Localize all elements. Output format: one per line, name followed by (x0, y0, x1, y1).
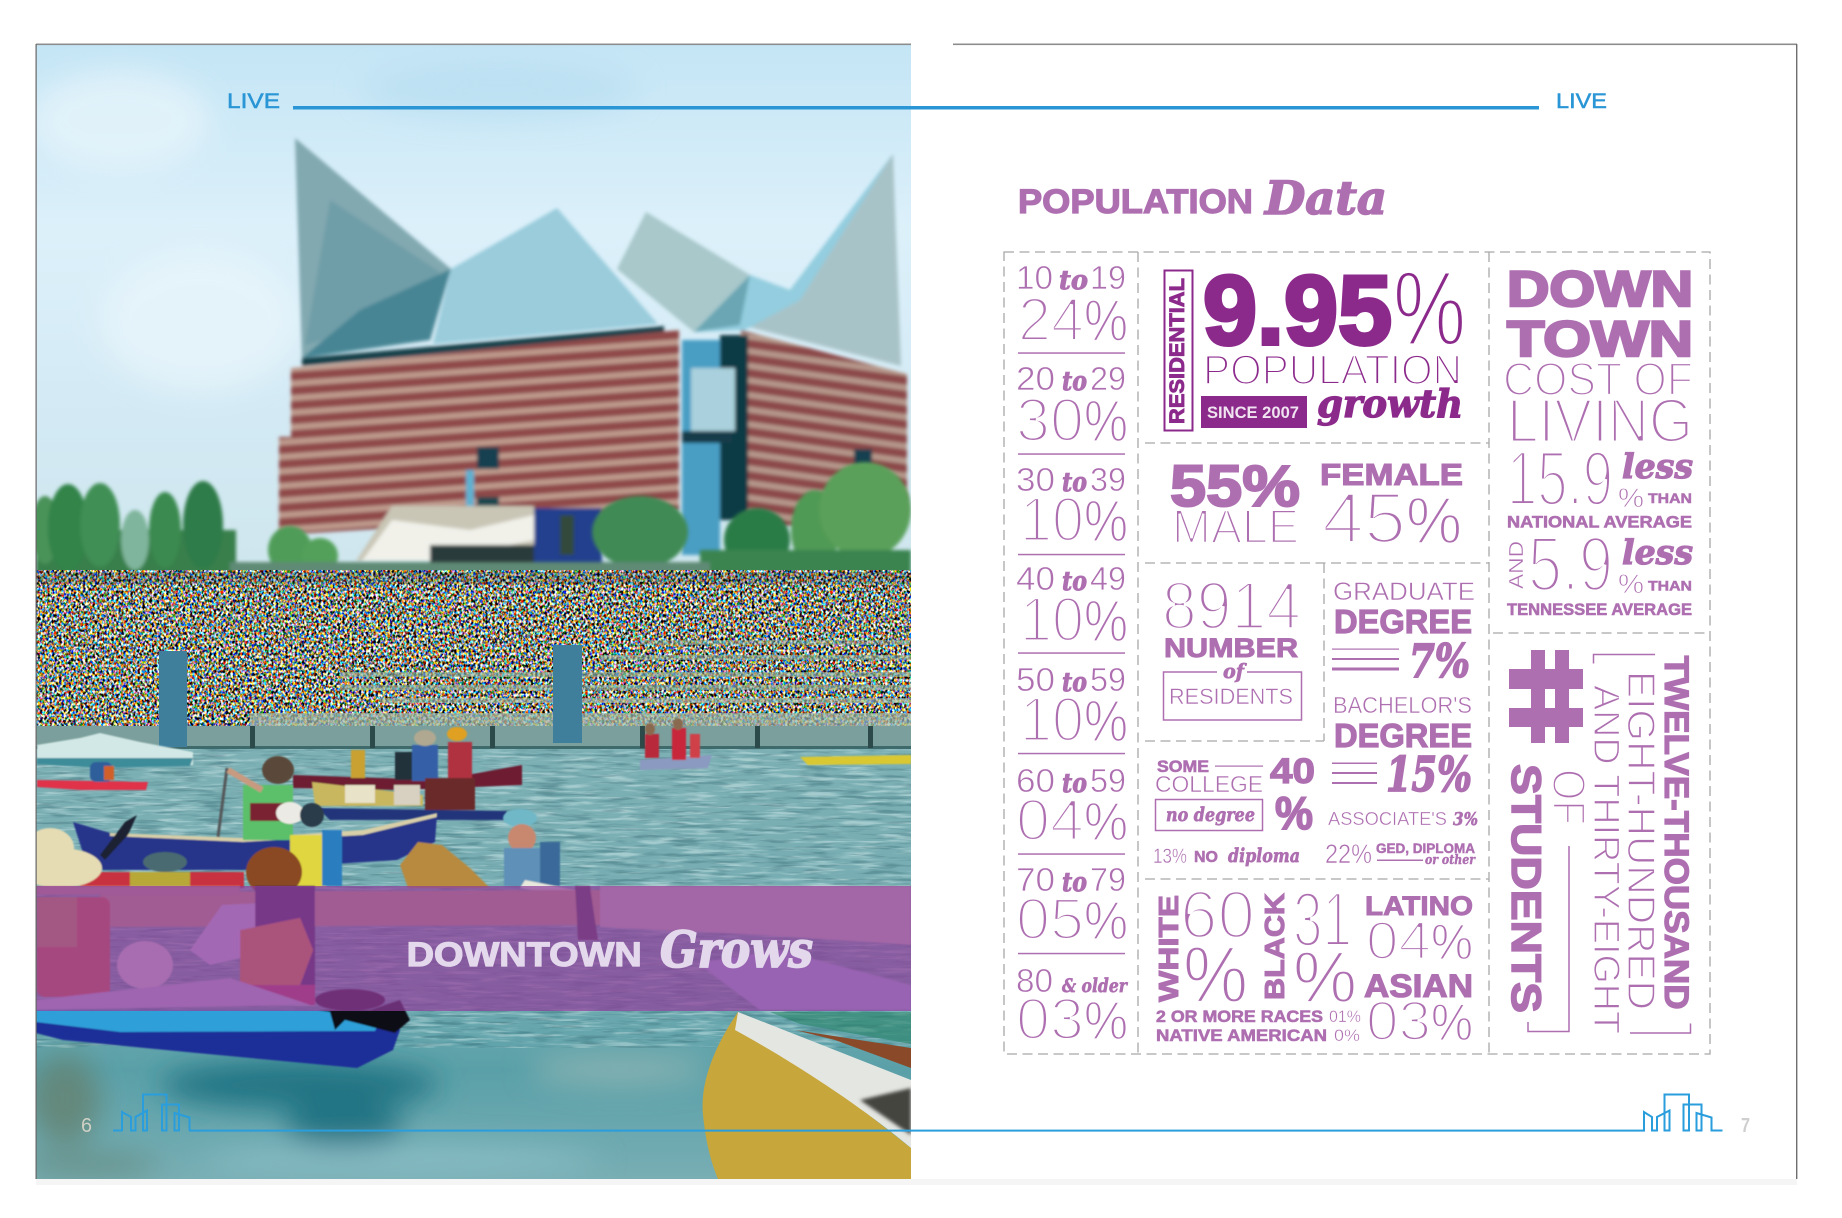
yellow canoe (703, 1012, 911, 1179)
latino 04%: % (1431, 914, 1473, 970)
growth script: growth (1317, 381, 1463, 426)
header line (293, 106, 1539, 110)
header: LIVE right: LIVE (1556, 90, 1607, 113)
boats under the band (36, 886, 911, 1011)
female 45% (1320, 457, 1463, 559)
latino 04% (1365, 891, 1473, 971)
white 60%: WHITE (1153, 895, 1184, 1002)
water ripples (36, 748, 911, 1048)
age row 10 to 19: 19 (1090, 259, 1126, 296)
aquarium building (279, 138, 907, 570)
age row 50 to 59: 59 (1090, 661, 1126, 698)
population: POPULATION (1203, 346, 1462, 393)
age row 70 to 79: 79 (1090, 861, 1126, 898)
associate's 3%: 3% (1453, 809, 1478, 830)
of: OF (1543, 769, 1595, 825)
15.9% less than national average: THAN (1648, 490, 1692, 506)
dashed grid frame (1004, 252, 1710, 1054)
panel: male female split (1170, 454, 1463, 559)
age row 10 to 19: % (1084, 289, 1128, 354)
eight-hundred: EIGHT-HUNDRED (1619, 671, 1662, 1010)
white 60%: % (1183, 930, 1248, 1019)
age row 70 to 79 (1016, 861, 1128, 952)
heading down town: DOWN (1507, 261, 1693, 317)
age row 20 to 29: 20 (1016, 360, 1055, 397)
panel: number of residents (1162, 568, 1302, 720)
13% no diploma: NO (1194, 849, 1218, 866)
heading down town (1507, 261, 1693, 367)
and 5.9% less than tennessee average (1506, 520, 1693, 619)
graduate degree: DEGREE (1334, 603, 1472, 640)
bachelor's degree: BACHELOR'S (1333, 692, 1472, 718)
residential boxed label: RESIDENTIAL (1166, 278, 1189, 424)
right page number: 7 (1741, 1115, 1750, 1137)
13% no diploma (1153, 845, 1300, 868)
and 5.9% less than tennessee average: TENNESSEE AVERAGE (1507, 600, 1692, 619)
native american: NATIVE AMERICAN (1156, 1026, 1327, 1045)
headline 9.95%: 9.95 (1203, 255, 1392, 365)
band heading: Downtown Grows: Grows (660, 920, 813, 979)
photo: aquarium, crowd and kayaks (18, 44, 911, 1179)
female 45%: FEMALE (1320, 457, 1463, 492)
age row 30 to 39: to (1062, 468, 1087, 498)
left bracket (1528, 846, 1569, 1032)
cost of living (1503, 353, 1693, 456)
heading down town: TOWN (1507, 311, 1693, 367)
black 31%: % (1293, 938, 1357, 1018)
age row 40 to 49: % (1084, 589, 1128, 654)
header: LIVE left: LIVE (227, 90, 280, 113)
age row 20 to 29: to (1062, 367, 1087, 397)
age row 10 to 19: 10 (1016, 259, 1053, 296)
age row 20 to 29 (1016, 360, 1128, 454)
band heading: Downtown Grows: DOWNTOWN (407, 936, 642, 974)
lower water reflections (20, 1055, 710, 1177)
sky (30, 44, 911, 574)
and 5.9% less than tennessee average: AND (1506, 541, 1528, 589)
age row 80 and older: & older (1062, 975, 1129, 997)
age row 50 to 59 (1016, 661, 1128, 755)
male 55%: 55% (1170, 454, 1300, 519)
and thirty-eight: AND THIRTY-EIGHT (1586, 685, 1627, 1034)
GED diploma 22% (1325, 839, 1476, 869)
GED diploma 22%: or other (1425, 853, 1476, 868)
native american: 0% (1334, 1026, 1360, 1045)
40 percent: 40 (1270, 752, 1315, 791)
panel: number of residents: NUMBER (1164, 633, 1298, 663)
headline 9.95% (1203, 250, 1466, 368)
age row 80 and older: % (1084, 991, 1128, 1051)
15.9% less than national average: 15.9 (1507, 434, 1613, 522)
panel: number of students (1503, 650, 1695, 1034)
age row 70 to 79: % (1084, 891, 1128, 951)
age row 30 to 39: 39 (1090, 461, 1126, 498)
blue kayak (36, 1000, 410, 1068)
purple band (36, 886, 911, 1011)
age row 50 to 59: 50 (1016, 661, 1055, 698)
trees (31, 462, 911, 575)
headline 9.95%: % (1393, 250, 1466, 368)
dock wall and pillars (36, 645, 911, 749)
panel: number of residents: RESIDENTS (1169, 684, 1293, 709)
two or more races: 01% (1329, 1007, 1361, 1026)
and 5.9% less than tennessee average: 5.9 (1528, 520, 1613, 608)
asian 03% (1364, 968, 1473, 1052)
twelve-thousand: TWELVE-THOUSAND (1657, 656, 1695, 1010)
panel: degrees (1325, 578, 1478, 869)
age row 50 to 59: % (1084, 689, 1128, 754)
icon: right skyline (1644, 1094, 1722, 1130)
graduate degree: GRADUATE (1333, 578, 1475, 606)
age row 60 to 59: % (1084, 792, 1128, 852)
footer line (189, 1130, 1645, 1132)
right bracket top (1594, 654, 1655, 664)
age row 50 to 59: to (1062, 668, 1087, 698)
left page number: 6 (81, 1115, 92, 1137)
tent and sign (356, 506, 534, 561)
latino 04%: LATINO (1365, 891, 1473, 921)
40 percent (1270, 752, 1315, 839)
age row 10 to 19: to (1059, 266, 1088, 296)
no degree box (1156, 800, 1262, 830)
panel: age groups (1016, 259, 1129, 1052)
crowd on the steps (36, 570, 911, 730)
age row 80 and older (1016, 962, 1129, 1052)
title: Population Data: POPULATION (1018, 183, 1253, 221)
age row 30 to 39: % (1084, 489, 1128, 554)
age row 60 to 59: 60 (1016, 762, 1055, 799)
cost of living: LIVING (1507, 387, 1693, 456)
panel: number of residents: 8914 (1162, 568, 1301, 644)
15.9% less than national average: % (1618, 483, 1644, 513)
40 percent: % (1275, 787, 1313, 839)
title: Population Data (1018, 171, 1387, 225)
asian 03%: % (1431, 994, 1473, 1052)
female 45%: % (1406, 483, 1462, 557)
GED diploma 22%: 22% (1325, 839, 1372, 869)
graduate degree: 7% (1409, 634, 1470, 688)
icon: left skyline (113, 1094, 190, 1130)
two or more races: 2 OR MORE RACES (1156, 1007, 1323, 1026)
panel: downtown cost of living (1503, 261, 1693, 619)
age row 20 to 29: 30 (1016, 386, 1084, 454)
and 5.9% less than tennessee average: THAN (1648, 578, 1692, 594)
band heading: Downtown Grows (408, 929, 813, 968)
13% no diploma: diploma (1228, 845, 1300, 867)
icon: hash symbol (1509, 650, 1583, 743)
black 31%: 31 (1293, 875, 1352, 963)
age row 60 to 59: 59 (1090, 762, 1126, 799)
panel: race and ethnicity (1153, 875, 1473, 1052)
13% no diploma: 13% (1153, 845, 1187, 868)
age row 40 to 49 (1016, 560, 1128, 655)
age row 40 to 49: 10 (1020, 585, 1084, 655)
male 55% (1170, 454, 1300, 554)
age row 40 to 49: 40 (1016, 560, 1055, 597)
panel: residential growth (1164, 250, 1466, 430)
age row 70 to 79: 05 (1016, 887, 1084, 952)
age row 20 to 29: % (1084, 389, 1128, 454)
age row 70 to 79: 70 (1016, 861, 1055, 898)
black 31%: BLACK (1259, 893, 1290, 1000)
cost of living: COST OF (1503, 353, 1693, 405)
panel: some college: SOME (1157, 757, 1209, 776)
bachelor's degree: DEGREE (1334, 717, 1472, 754)
white 60% (1153, 877, 1255, 1019)
black 31% (1259, 875, 1357, 1018)
15.9% less than national average: less (1622, 447, 1693, 487)
age row 60 to 59: 04 (1016, 788, 1084, 853)
age row 40 to 49: to (1062, 567, 1087, 597)
panel: number of residents: of (1223, 659, 1247, 683)
water (36, 745, 911, 1179)
associate's 3%: ASSOCIATE'S (1328, 809, 1447, 829)
since 2007 tag: SINCE 2007 (1207, 404, 1299, 422)
asian 03%: ASIAN (1364, 968, 1473, 1004)
GED diploma 22%: GED, DIPLOMA (1376, 841, 1475, 856)
age row 50 to 59: 10 (1020, 685, 1084, 755)
bachelor's degree (1332, 692, 1472, 803)
panel: some college (1153, 752, 1315, 868)
left page edge (36, 44, 911, 1179)
female 45%: 45 (1322, 479, 1406, 559)
latino 04%: 04 (1366, 911, 1431, 971)
no degree box: no degree (1166, 804, 1255, 826)
students: STUDENTS (1503, 764, 1550, 1013)
age row 20 to 29: 29 (1090, 360, 1126, 397)
age row 10 to 19 (1016, 259, 1128, 354)
age row 60 to 59 (1016, 762, 1128, 853)
age row 10 to 19: 24 (1018, 286, 1084, 354)
title: Population Data: Data (1263, 171, 1387, 225)
age row 30 to 39: 30 (1016, 461, 1055, 498)
age row 80 and older: 80 (1016, 962, 1053, 999)
since 2007 tag (1201, 396, 1307, 428)
age row 30 to 39: 10 (1020, 485, 1084, 555)
age row 60 to 59: to (1062, 769, 1087, 799)
male 55%: MALE (1172, 501, 1299, 554)
panel: some college: COLLEGE (1155, 771, 1263, 797)
15.9% less than national average: NATIONAL AVERAGE (1507, 512, 1692, 532)
foreground boats and paddlers (36, 755, 574, 890)
age row 40 to 49: 49 (1090, 560, 1126, 597)
age row 80 and older: 03 (1016, 987, 1084, 1052)
right bracket bottom (1630, 1024, 1690, 1033)
age row 30 to 39 (1016, 461, 1128, 555)
age row 70 to 79: to (1062, 868, 1087, 898)
and 5.9% less than tennessee average: % (1618, 569, 1644, 599)
bachelor's degree: 15% (1386, 747, 1472, 803)
white 60%: 60 (1180, 877, 1255, 953)
asian 03%: 03 (1366, 989, 1431, 1052)
graduate degree (1332, 578, 1475, 688)
and 5.9% less than tennessee average: less (1622, 533, 1693, 573)
background boats (37, 718, 911, 820)
